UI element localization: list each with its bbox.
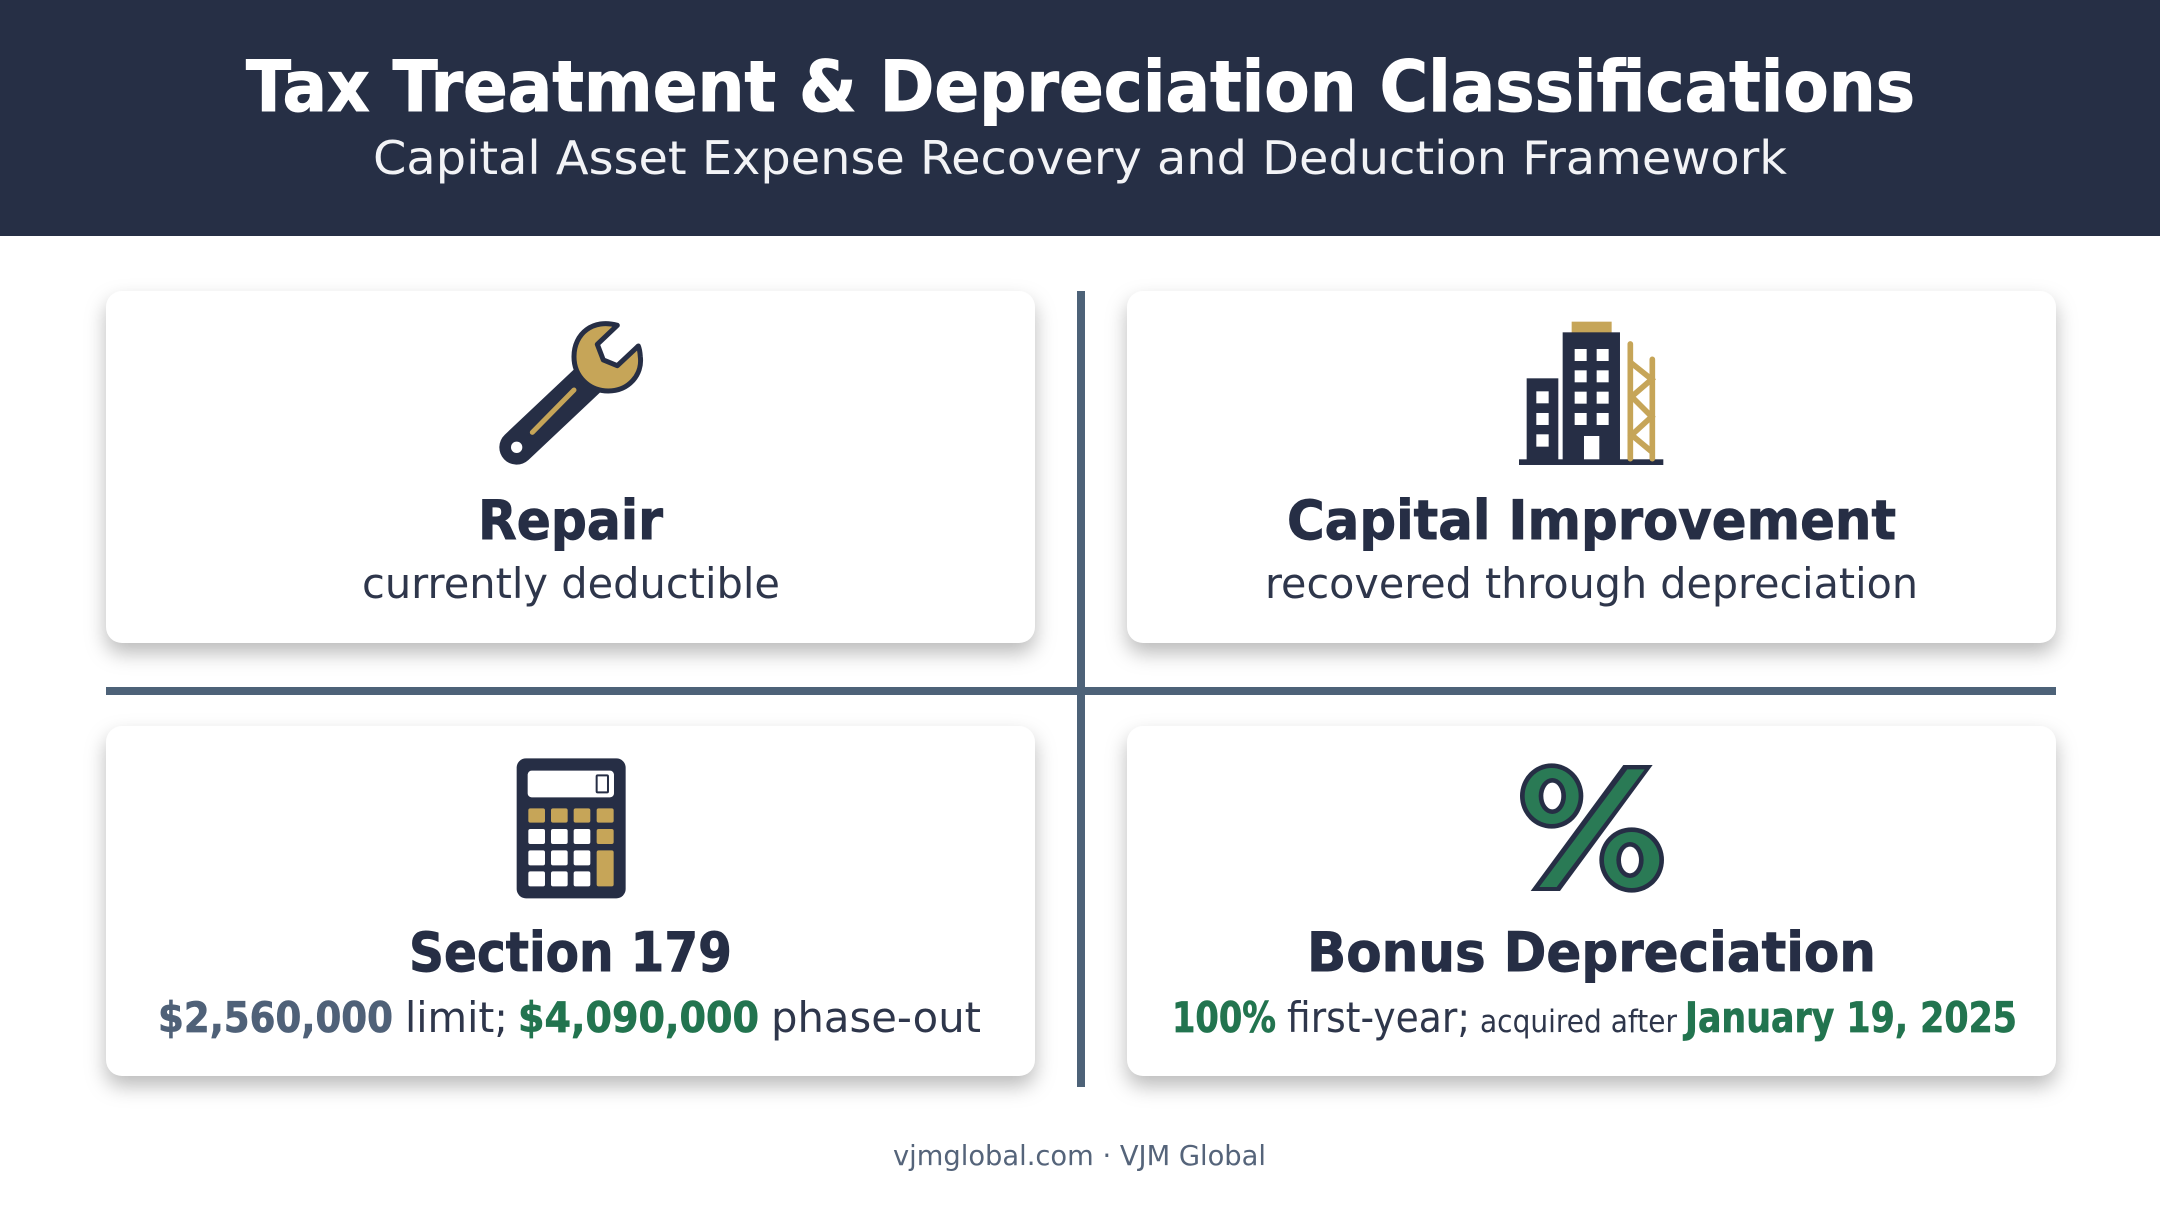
text: currently deductible: currently deductible	[362, 559, 780, 608]
title: Tax Treatment & Depreciation Classifications	[246, 46, 1915, 128]
panel: repair	[106, 291, 1035, 643]
divider: vertical	[1077, 291, 1085, 1087]
panel: bonus depreciation	[1127, 726, 2056, 1076]
icon: wrench	[511, 324, 641, 453]
icon: percent sign	[1520, 763, 1664, 893]
heading: section 179: Section 179	[409, 921, 732, 984]
text: bonus depreciation terms: 100%	[1172, 993, 1276, 1042]
text: bonus depreciation terms: January 19, 2025	[1683, 993, 2017, 1042]
heading: capital improvement: Capital Improvement	[1287, 489, 1896, 552]
text: recovered through depreciation: recovered through depreciation	[1265, 559, 1918, 608]
panel: capital improvement	[1127, 291, 2056, 643]
text: section 179 limits: $4,090,000	[518, 993, 759, 1042]
text: bonus depreciation terms	[1172, 993, 2017, 1042]
text: section 179 limits: limit;	[405, 993, 508, 1042]
text: section 179 limits	[158, 993, 981, 1042]
text: bonus depreciation terms: acquired after	[1480, 1004, 1677, 1040]
heading: repair: Repair	[478, 489, 663, 552]
text: bonus depreciation terms: first-year;	[1287, 993, 1470, 1042]
subtitle: Capital Asset Expense Recovery and Deduction Framework	[373, 131, 1787, 185]
text: section 179 limits: phase-out	[771, 993, 981, 1042]
footer: vjmglobal.com · VJM Global	[893, 1139, 1266, 1172]
heading: bonus depreciation: Bonus Depreciation	[1307, 921, 1876, 984]
header band	[0, 0, 2160, 236]
icon: buildings with scaffold	[1519, 322, 1663, 465]
panel: section 179	[106, 726, 1035, 1076]
divider: horizontal	[106, 687, 2056, 695]
text: section 179 limits: $2,560,000	[158, 993, 393, 1042]
icon: calculator	[517, 758, 626, 898]
